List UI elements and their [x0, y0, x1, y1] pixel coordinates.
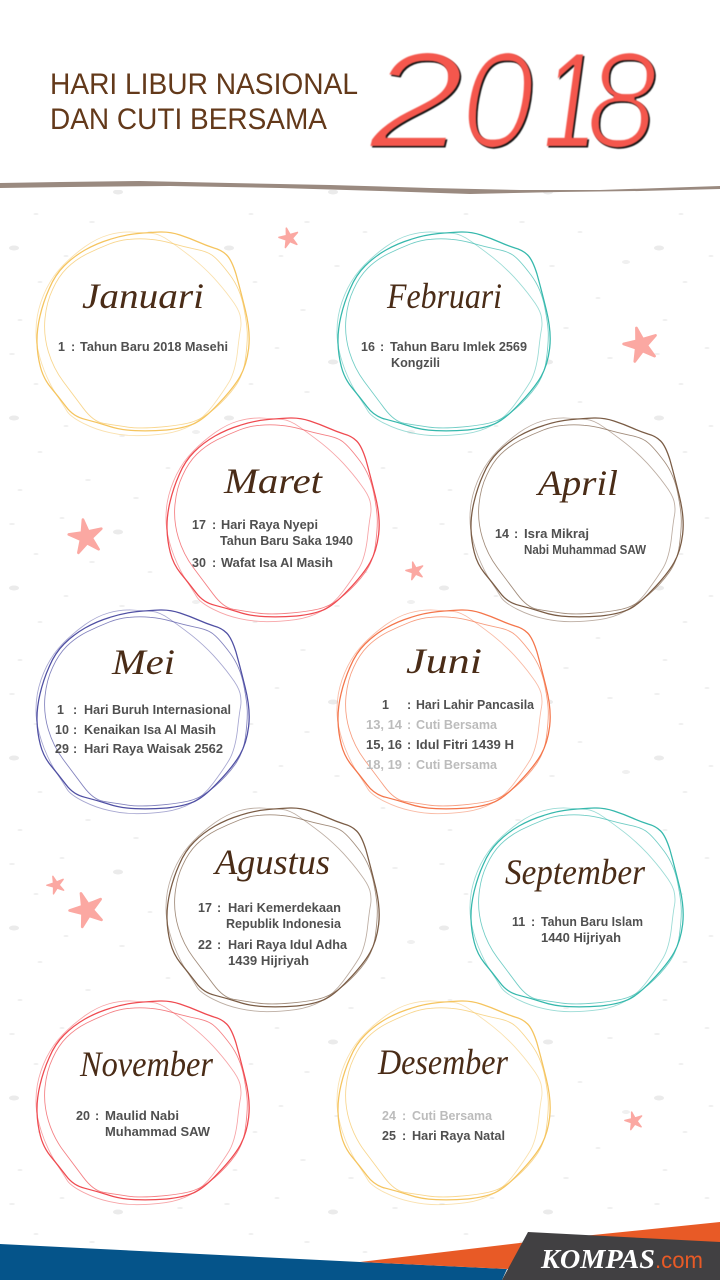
holiday entries: : [73, 703, 77, 717]
title [50, 68, 358, 136]
holiday entry: Tahun Baru Islam [541, 915, 643, 929]
month heading: April [536, 463, 618, 503]
holiday entries: Tahun Baru Saka 1940 [220, 534, 353, 548]
logo: KOMPAS.com [540, 1244, 703, 1274]
holiday entry: : [71, 340, 75, 354]
holiday entries: 13, 14 [366, 718, 402, 732]
ring [337, 1001, 550, 1205]
holiday entries [55, 703, 231, 756]
holiday entries: : [73, 742, 77, 756]
footer: dark logo plate [502, 1232, 720, 1280]
footer: blue band [0, 1244, 507, 1280]
holiday entry [361, 340, 527, 370]
holiday entries: : [407, 738, 411, 752]
month heading: Maret [223, 461, 323, 501]
starfish: right [620, 324, 661, 363]
panel: Januari [36, 232, 249, 436]
holiday entries: : [217, 938, 221, 952]
holiday entries: 17 [192, 518, 206, 532]
holiday entries: 29 [55, 742, 69, 756]
holiday entry [512, 915, 643, 945]
holiday entries: : [212, 556, 216, 570]
month heading: Februari [386, 276, 502, 316]
holiday entries: : [73, 723, 77, 737]
title: DAN CUTI BERSAMA [50, 103, 327, 136]
starfish: lower right [623, 1110, 644, 1130]
footer: orange band [360, 1222, 720, 1269]
holiday entry: 11 [512, 915, 525, 929]
panel: Maret [166, 418, 379, 622]
month heading: Desember [377, 1042, 509, 1082]
ring [36, 232, 249, 436]
ring [470, 418, 683, 622]
holiday entries: Hari Raya Nyepi [221, 518, 318, 532]
holiday entries: 22 [198, 938, 212, 952]
year 2018: 1 [544, 24, 596, 176]
holiday entries [198, 901, 348, 968]
holiday entries [366, 698, 535, 772]
panel: November [36, 1001, 249, 1205]
holiday entries: Cuti Bersama [416, 758, 498, 772]
holiday entry: Isra Mikraj [524, 527, 589, 541]
year 2018: 8 [586, 24, 657, 176]
holiday entries: Hari Raya Idul Adha [228, 938, 348, 952]
holiday entries: Republik Indonesia [226, 917, 342, 931]
starfish: top centre [277, 226, 300, 248]
holiday entry: 14 [495, 527, 509, 541]
header band [0, 0, 720, 186]
holiday entry: 16 [361, 340, 375, 354]
holiday entries: 25 [382, 1129, 396, 1143]
holiday entry [495, 527, 646, 557]
starfish: left [67, 517, 105, 554]
month heading: Juni [406, 641, 482, 681]
holiday entries: Hari Raya Waisak 2562 [84, 742, 223, 756]
year 2018 [368, 24, 657, 176]
holiday entries [382, 1109, 505, 1143]
logo: KOMPAS.com: .com [655, 1247, 703, 1273]
holiday entries: Cuti Bersama [412, 1109, 493, 1123]
panel: Juni [337, 610, 550, 814]
holiday entries: : [407, 698, 411, 712]
holiday entries: Wafat Isa Al Masih [221, 556, 333, 570]
holiday entries: : [212, 518, 216, 532]
holiday entries: Hari Buruh Internasional [84, 703, 231, 717]
holiday entries: 10 [55, 723, 69, 737]
holiday entries: : [407, 718, 411, 732]
year 2018: 0 [461, 25, 534, 176]
holiday entries: 1 [382, 698, 389, 712]
month heading: Januari [82, 276, 204, 316]
starfish: small left [45, 873, 67, 895]
holiday entry: 1 [58, 340, 65, 354]
holiday entry: 20 [76, 1109, 90, 1123]
ring [337, 232, 550, 436]
holiday entries: 30 [192, 556, 206, 570]
ring [36, 1001, 249, 1205]
brush stroke divider [0, 181, 720, 194]
month heading: November [79, 1044, 214, 1084]
holiday entries: Idul Fitri 1439 H [416, 738, 514, 752]
title: HARI LIBUR NASIONAL [50, 68, 358, 101]
holiday entries: : [402, 1109, 406, 1123]
ring [166, 808, 379, 1012]
holiday entries: 17 [198, 901, 212, 915]
holiday entries: : [402, 1129, 406, 1143]
holiday entries: Hari Kemerdekaan [228, 901, 341, 915]
holiday entry: : [380, 340, 384, 354]
panel: September [470, 808, 683, 1012]
holiday entry: Muhammad SAW [105, 1125, 210, 1139]
holiday entry: Maulid Nabi [105, 1109, 179, 1123]
holiday entry: : [531, 915, 535, 929]
month heading: Agustus [213, 842, 330, 882]
panel: Mei [36, 610, 249, 814]
panel: April [470, 418, 683, 622]
ring [36, 610, 249, 814]
panel: Februari [337, 232, 550, 436]
holiday entries: : [217, 901, 221, 915]
holiday entry [76, 1109, 210, 1139]
panel: Desember [337, 1001, 550, 1205]
holiday entry: 1440 Hijriyah [541, 931, 621, 945]
ring [470, 808, 683, 1012]
holiday entry: : [514, 527, 518, 541]
ring [166, 418, 379, 622]
month heading: Mei [111, 642, 175, 682]
holiday entry: Kongzili [391, 356, 440, 370]
holiday entry: Tahun Baru Imlek 2569 [390, 340, 527, 354]
holiday entry: Nabi Muhammad SAW [524, 543, 646, 557]
holiday entries: 24 [382, 1109, 396, 1123]
holiday entries: Hari Raya Natal [412, 1129, 505, 1143]
starfish: centre [404, 560, 425, 580]
starfish: large left [65, 888, 107, 929]
holiday entries: 1 [57, 703, 64, 717]
holiday entries: Kenaikan Isa Al Masih [84, 723, 216, 737]
holiday entry: Tahun Baru 2018 Masehi [80, 340, 228, 354]
holiday entries: Hari Lahir Pancasila [416, 698, 535, 712]
year 2018: 2 [368, 24, 464, 176]
holiday entries: Cuti Bersama [416, 718, 498, 732]
holiday entries [192, 518, 353, 570]
holiday entries: 1439 Hijriyah [228, 954, 309, 968]
holiday entries: 15, 16 [366, 738, 402, 752]
logo: KOMPAS.com: KOMPAS [540, 1244, 655, 1274]
ring [337, 610, 550, 814]
holiday entries: 18, 19 [366, 758, 402, 772]
holiday entries: : [407, 758, 411, 772]
panel: Agustus [166, 808, 379, 1012]
holiday entry: : [95, 1109, 99, 1123]
month heading: September [505, 852, 646, 892]
